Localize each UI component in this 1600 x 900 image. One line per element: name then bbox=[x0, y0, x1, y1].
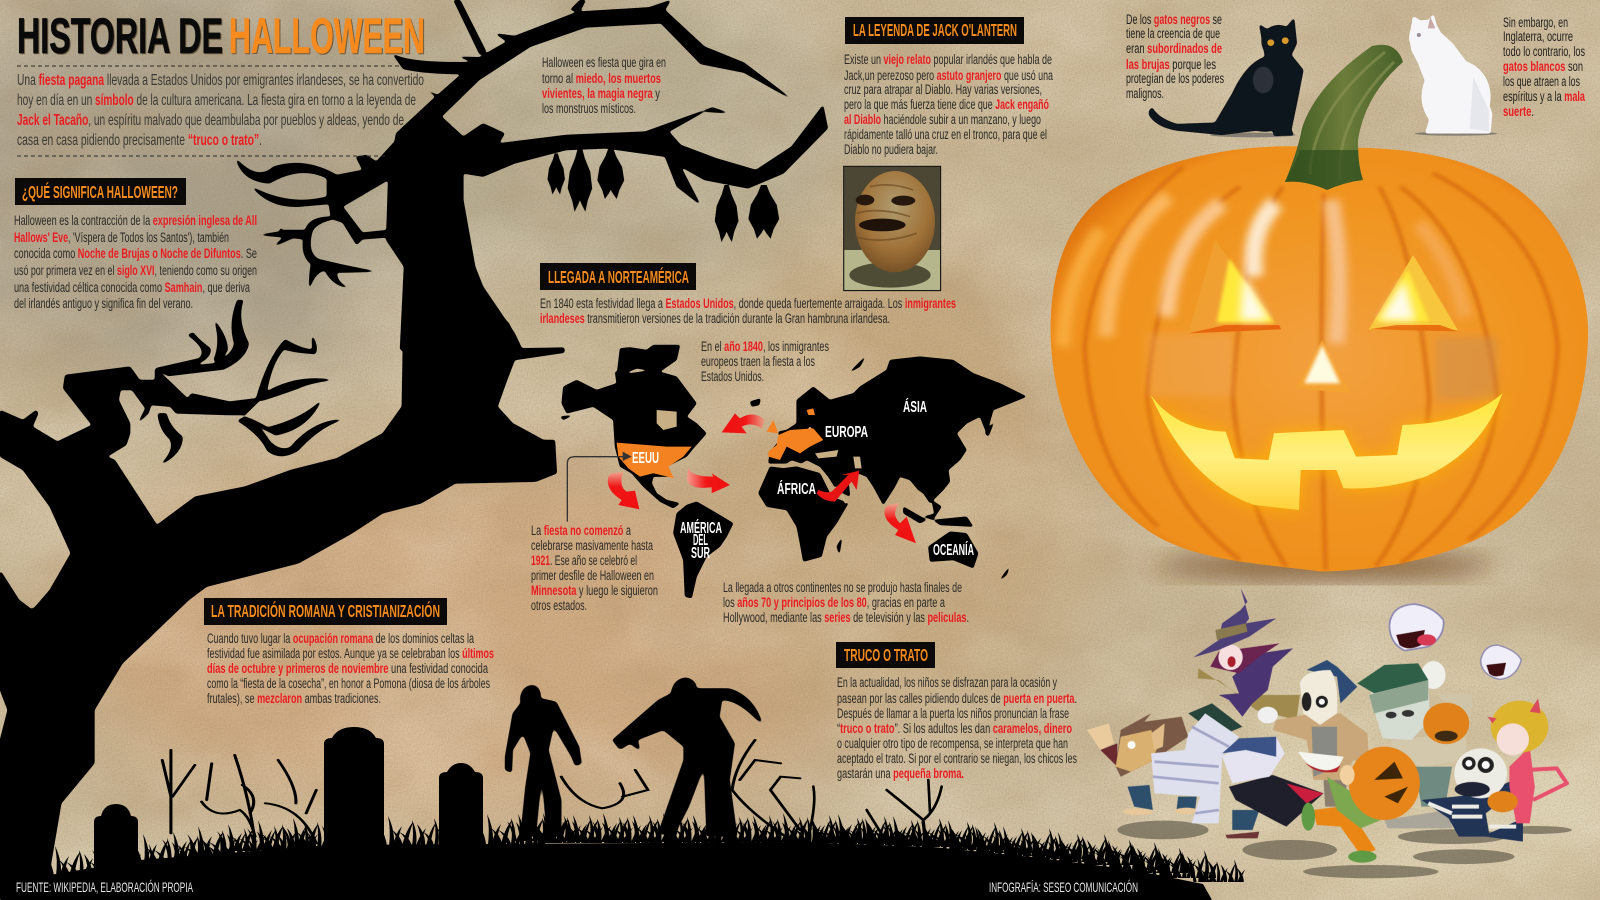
map labels: AMÉRICA bbox=[680, 520, 722, 537]
graveyard ground with grass bbox=[0, 813, 1245, 900]
title: HALLOWEEN bbox=[229, 8, 425, 64]
heading: la leyenda de jack bbox=[845, 17, 1024, 44]
heading: la leyenda de jack: LA LEYENDA DE JACK O'LANTERN bbox=[853, 20, 1017, 40]
intro text: Jack el Tacaño, un espíritu malvado que deambulaba por pueblos y aldeas, yendo de bbox=[17, 112, 404, 129]
map labels: SUR bbox=[691, 545, 710, 562]
map labels: EEUU bbox=[632, 450, 659, 467]
intro text: Una fiesta pagana llevada a Estados Unidos por emigrantes irlandeses, se ha convertido bbox=[17, 72, 424, 89]
intro text: hoy en día en un símbolo de la cultura americana. La fiesta gira en torno a la leyenda de bbox=[17, 92, 416, 109]
character shadows bbox=[1117, 821, 1572, 878]
text: la fiesta no comenzo bbox=[531, 523, 658, 613]
world map bbox=[560, 345, 1027, 598]
character: large ghost bbox=[1389, 604, 1444, 651]
heading: que significa halloween bbox=[15, 178, 186, 205]
text: la tradicion romana: festividad fue asimilada por estos. Aunque ya se celebraban los últimos bbox=[207, 646, 494, 661]
map: orange Europe bbox=[767, 408, 823, 460]
text: truco o trato: Después de llamar a la puerta los niños pronuncian la frase bbox=[837, 706, 1069, 721]
text: la tradicion romana: frutales), se mezclaron ambas tradiciones. bbox=[207, 691, 381, 706]
text: gatos blancos: suerte. bbox=[1503, 104, 1534, 119]
text: la fiesta no comenzo: primer desfile de Halloween en bbox=[531, 568, 654, 583]
pumpkin mouth bbox=[1151, 393, 1502, 510]
text: la leyenda de jack bbox=[844, 52, 1053, 157]
heading: llegada a norteamerica: LLEGADA A NORTEAMÉRICA bbox=[548, 266, 689, 287]
text: fiesta bbox=[542, 55, 666, 116]
tree lower limbs and face profile bbox=[0, 300, 564, 640]
text: la leyenda de jack: Jack,un perezoso pero astuto granjero que usó una bbox=[844, 68, 1053, 83]
pumpkin nose bbox=[1295, 340, 1351, 393]
dead shrubs bbox=[162, 740, 800, 843]
text: la llegada a otros continentes: los años 70 y principios de los 80, gracias en parte a bbox=[723, 595, 945, 610]
text: gatos negros bbox=[1126, 12, 1224, 101]
text: ano 1840: En el año 1840, los inmigrantes bbox=[701, 339, 829, 354]
gravestones bbox=[94, 727, 483, 870]
tree trunk base bbox=[0, 600, 189, 900]
map labels: ÁFRICA bbox=[777, 481, 816, 498]
text: la llegada a otros continentes bbox=[723, 580, 969, 625]
pumpkin shadow bbox=[1156, 554, 1496, 578]
character: small ghost bbox=[1481, 645, 1521, 679]
intro text: casa en casa pidiendo precisamente “truco o trato”. bbox=[17, 132, 262, 149]
source footer: FUENTE: WIKIPEDIA, ELABORACIÓN PROPIA bbox=[16, 879, 193, 895]
text: la tradicion romana: Cuando tuvo lugar la ocupación romana de los dominios celtas la bbox=[207, 631, 474, 646]
text: gatos negros: De los gatos negros se bbox=[1126, 12, 1222, 27]
map labels: DEL bbox=[693, 532, 708, 549]
arrow: USA to South bbox=[608, 472, 639, 509]
text: llegada a norteamerica bbox=[540, 296, 956, 326]
text: la fiesta no comenzo: Minnesota y luego le siguieron bbox=[531, 583, 658, 598]
character: mummy bbox=[1151, 703, 1242, 823]
character: witch bbox=[1193, 588, 1300, 720]
map: orange United States bbox=[617, 443, 692, 478]
text: fiesta: los monstruos místicos. bbox=[542, 101, 636, 116]
text: la tradicion romana: días de octubre y primeros de noviembre una festividad conocida bbox=[207, 661, 488, 676]
character: vampire bbox=[1222, 737, 1324, 838]
text: que significa halloween: del irlandés antiguo y significa fin del verano. bbox=[14, 296, 193, 311]
text: la leyenda de jack: pero la que más fuerza tiene dice que Jack engañó bbox=[844, 97, 1049, 112]
text: la fiesta no comenzo: otros estados. bbox=[531, 598, 587, 613]
text: ano 1840 bbox=[701, 339, 829, 384]
text: ano 1840: Estados Unidos. bbox=[701, 369, 764, 384]
text: truco o trato: “truco o trato”. Si los adultos les dan caramelos, dinero bbox=[837, 721, 1072, 736]
text: la llegada a otros continentes: La llegada a otros continentes no se produjo hasta finales de bbox=[723, 580, 962, 595]
heading: truco o trato: TRUCO O TRATO bbox=[844, 645, 928, 665]
text: gatos blancos: Sin embargo, en bbox=[1503, 15, 1568, 30]
map labels: ÁSIA bbox=[903, 399, 927, 416]
character: frankenstein monster bbox=[1357, 661, 1472, 828]
text: fiesta: Halloween es fiesta que gira en bbox=[542, 55, 666, 70]
text: truco o trato bbox=[837, 675, 1077, 781]
text: gatos negros: las brujas porque les bbox=[1126, 57, 1216, 72]
text: gatos negros: protegían de los poderes bbox=[1126, 71, 1224, 86]
text: que significa halloween: Halloween es la contracción de la expresión inglesa de All bbox=[14, 213, 257, 228]
text: la leyenda de jack: cruz para atrapar al Diablo. Hay varias versiones, bbox=[844, 82, 1042, 97]
arrow: Asia to Oceania bbox=[884, 503, 916, 543]
character: devil girl bbox=[1487, 698, 1567, 823]
tree upper crown with branches bbox=[236, 0, 828, 350]
text: la leyenda de jack: rápidamente talló una cruz en el tronco, para que el bbox=[844, 127, 1047, 142]
character: skeleton bbox=[1422, 748, 1525, 842]
icon: black cat bbox=[1149, 18, 1303, 137]
photo: carved turnip lantern bbox=[844, 166, 941, 291]
pumpkin right eye bbox=[1369, 255, 1458, 331]
character: pumpkin-head kid bbox=[1302, 747, 1420, 863]
text: truco o trato: gastarán una pequeña broma. bbox=[837, 766, 964, 781]
character: werewolf bbox=[1087, 713, 1198, 815]
icon: right zombie bbox=[612, 677, 763, 837]
heading: la tradicion romana bbox=[204, 598, 447, 625]
pumpkin left eye bbox=[1188, 240, 1281, 333]
text: que significa halloween: Hallows' Eve, 'Víspera de Todos los Santos'), también bbox=[14, 230, 229, 245]
text: que significa halloween: usó por primera vez en el siglo XVI, teniendo como su origen bbox=[14, 263, 257, 278]
map labels bbox=[632, 399, 974, 562]
text: que significa halloween: conocida como Noche de Brujas o Noche de Difuntos. Se bbox=[14, 246, 257, 261]
text: truco o trato: aceptado el trato. Si por el contrario se niegan, los chicos les bbox=[837, 751, 1077, 766]
text: truco o trato: o cualquier otro tipo de recompensa, se interpreta que han bbox=[837, 736, 1068, 751]
text: llegada a norteamerica: irlandeses transmitieron versiones de la tradición durante la Gran hambruna irlandesa. bbox=[540, 311, 890, 326]
text: que significa halloween bbox=[14, 213, 257, 311]
text: gatos negros: eran subordinados de bbox=[1126, 41, 1222, 56]
text: gatos blancos: espíritus y a la mala bbox=[1503, 89, 1585, 104]
text: truco o trato: En la actualidad, los niños se disfrazan para la ocasión y bbox=[837, 675, 1057, 690]
text: la leyenda de jack: Diablo no pudiera bajar. bbox=[844, 142, 938, 157]
heading: truco o trato bbox=[836, 642, 935, 668]
text: fiesta: vivientes, la magia negra y bbox=[542, 86, 660, 101]
text: gatos negros: tiene la creencia de que bbox=[1126, 26, 1220, 41]
callout line to USA bbox=[567, 452, 632, 522]
credit footer: INFOGRAFÍA: SESEO COMUNICACIÓN bbox=[989, 879, 1138, 895]
icon: jack-o-lantern pumpkin bbox=[1051, 146, 1588, 572]
text: llegada a norteamerica: En 1840 esta festividad llega a Estados Unidos, donde queda fuertemente arraigada. Los inmigrantes bbox=[540, 296, 956, 311]
text: gatos blancos bbox=[1503, 15, 1585, 119]
heading: que significa halloween: ¿QUÉ SIGNIFICA HALLOWEEN? bbox=[22, 181, 178, 202]
map: inland seas bbox=[657, 410, 862, 503]
character: masked slasher bbox=[1258, 660, 1369, 807]
text: gatos blancos: gatos blancos son bbox=[1503, 59, 1583, 74]
text: la tradicion romana: como la “fiesta de la cosecha”, en honor a Pomona (diosa de los árboles bbox=[207, 676, 490, 691]
title: HISTORIA DE bbox=[17, 8, 223, 64]
text: la fiesta no comenzo: 1921. Ese año se celebró el bbox=[531, 553, 637, 568]
arrow: USA to East bbox=[687, 467, 730, 493]
map labels: OCEANÍA bbox=[933, 542, 974, 559]
arrow: Africa to Asia bbox=[817, 471, 859, 502]
icon: hanging bats bbox=[548, 148, 779, 242]
icon: white cat bbox=[1409, 14, 1497, 136]
icon: pumpkin stem bbox=[1285, 45, 1403, 190]
text: la leyenda de jack: Existe un viejo relato popular irlandés que habla de bbox=[844, 52, 1052, 67]
dead shrub near footer bbox=[808, 780, 942, 847]
text: que significa halloween: una festividad céltica conocida como Samhain, que deriva bbox=[14, 280, 250, 295]
tree silhouette bbox=[0, 0, 828, 900]
map labels: EUROPA bbox=[825, 424, 868, 441]
costumed monsters group bbox=[1087, 588, 1572, 878]
heading: llegada a norteamerica bbox=[540, 263, 696, 290]
text: la leyenda de jack: al Diablo haciéndole subir a un manzano, y luego bbox=[844, 112, 1041, 127]
text: fiesta: torno al miedo, los muertos bbox=[542, 71, 661, 86]
heading: la tradicion romana: LA TRADICIÓN ROMANA Y CRISTIANIZACIÓN bbox=[211, 600, 440, 621]
text: ano 1840: europeos traen la fiesta a los bbox=[701, 354, 815, 369]
text: la tradicion romana bbox=[207, 631, 494, 706]
map: continents bbox=[560, 345, 1027, 598]
icon: left zombie bbox=[505, 685, 582, 837]
text: gatos negros: malignos. bbox=[1126, 86, 1164, 101]
text: la fiesta no comenzo: La fiesta no comenzó a bbox=[531, 523, 631, 538]
intro text bbox=[17, 72, 424, 149]
text: truco o trato: pasean por las calles pidiendo dulces de puerta en puerta. bbox=[837, 691, 1077, 706]
text: la llegada a otros continentes: Hollywood, mediante las series de televisión y las peliculas. bbox=[723, 610, 969, 625]
arrow: Europe to America bbox=[722, 413, 765, 433]
text: la fiesta no comenzo: celebrarse masivamente hasta bbox=[531, 538, 653, 553]
